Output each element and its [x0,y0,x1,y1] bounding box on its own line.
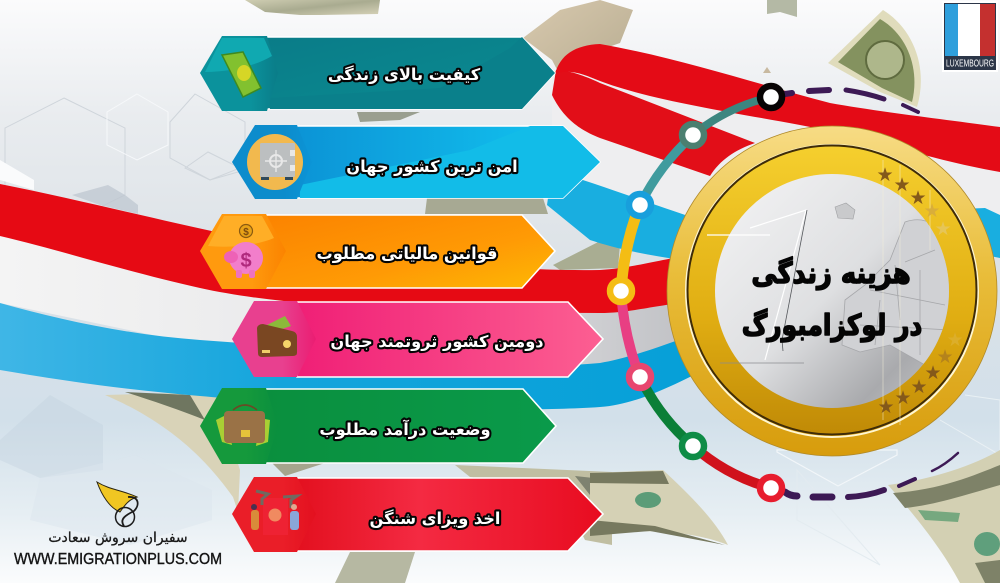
banner 2: safest country [232,125,600,199]
banner 5: income status [200,388,556,464]
banner 1: quality of life [200,36,555,111]
ribbon: top blue band [547,170,1000,262]
company logo: سفیران سروش سعادت [48,530,188,546]
coin stars: ★ [909,187,927,209]
hexagon [232,125,312,199]
banner 1: quality of life: کیفیت بالای زندگی [328,65,481,84]
hexagon [232,301,316,377]
banner 5: income status: وضعیت درآمد مطلوب [319,419,491,439]
luxembourg flag badge [942,1,998,72]
ribbon: left flag blue band [0,303,700,410]
banner 3: tax laws [200,214,555,289]
icon: wallet [257,316,297,357]
coin stars [876,164,964,418]
ribbon: lower red fold [552,70,755,176]
title [742,257,922,343]
banner 3: tax laws: قوانین مالیاتی مطلوب [317,244,497,263]
coin stars: ★ [910,376,928,398]
coin stars: ★ [936,346,954,368]
timeline nodes [610,86,782,499]
coin stars: ★ [893,174,911,196]
banner 6: schengen visa: اخذ ویزای شنگن [370,509,500,528]
euro coin [667,126,997,456]
ribbon: left flag white band [0,232,700,365]
company logo: WWW.EMIGRATIONPLUS.COM [14,551,222,568]
icon: briefcase with money [216,405,270,446]
coin stars: ★ [876,164,894,186]
coin stars: ★ [934,218,952,240]
icon: golden wing and swan [97,482,138,526]
banner 4: second richest country: دومین کشور ثروتمند جهان [330,332,544,351]
hexagon [200,36,278,111]
icon: piggy bank: $ [243,227,249,238]
coin stars: ★ [923,200,941,222]
icon: piggy bank: $ [240,250,252,272]
icon: passport with people [251,491,299,535]
icon: piggy bank [224,224,263,278]
purple dashes [785,90,958,497]
banner 6: schengen visa [232,477,603,552]
icon: safe [247,134,303,190]
ribbon: top white band [552,70,1000,240]
coin stars: ★ [924,362,942,384]
hexagon [200,214,286,289]
coin stars: ★ [946,329,964,351]
title: هزینه زندگی [751,257,911,290]
hexagon [200,388,278,464]
banner 2: safest country: امن ترین کشور جهان [346,157,518,176]
map of europe on coin [835,203,952,365]
title: در لوکزامبورگ [742,308,922,343]
hexagon [232,477,316,552]
coin stars: ★ [894,387,912,409]
ribbon: upper red fold [555,44,1000,172]
ribbon: left flag red band [0,184,690,313]
company logo [14,482,222,568]
coin stars: ★ [877,396,895,418]
banner 4: second richest country [232,301,603,377]
timeline arc [621,90,958,497]
numeral one outline on coin [707,210,806,360]
icon: banknote [222,52,261,97]
